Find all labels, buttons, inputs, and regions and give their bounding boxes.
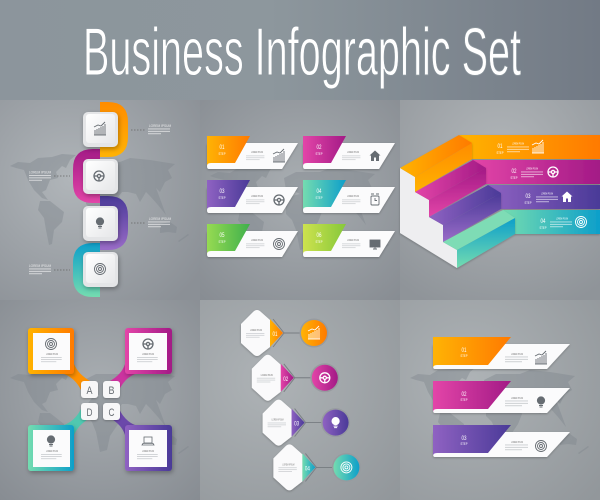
step 05: LOREM IPSUM xyxy=(251,238,263,242)
step 04: 04 xyxy=(316,188,322,195)
connector B xyxy=(110,364,135,390)
ribbon 03: 03 xyxy=(526,193,531,200)
ribbon 04: 04 xyxy=(540,218,546,225)
tile C: C xyxy=(108,407,115,419)
panel: vertical ribbon steps xyxy=(0,100,200,300)
tile A: A xyxy=(86,385,93,397)
ribbon: purple xyxy=(100,196,128,250)
tile D xyxy=(81,403,98,420)
step 01: LOREM IPSUM xyxy=(511,352,523,356)
panel: 3D staircase xyxy=(400,100,600,300)
step 03 xyxy=(207,180,298,213)
step 05: STEP xyxy=(218,240,226,244)
step 01: STEP xyxy=(460,354,468,358)
step 01: LOREM IPSUM xyxy=(251,150,263,154)
step 02: 02 xyxy=(462,391,467,398)
callout: step 2: LOREM IPSUM xyxy=(29,170,51,174)
step 03 xyxy=(433,425,570,457)
staircase xyxy=(400,135,515,268)
step 05 xyxy=(207,224,298,257)
tile C xyxy=(103,403,120,420)
step 04: STEP xyxy=(316,196,323,200)
card: D bulb xyxy=(28,425,74,471)
step 04: LOREM IPSUM xyxy=(282,462,295,466)
card: A target: LOREM IPSUM xyxy=(46,352,58,356)
ribbon 01: STEP xyxy=(496,151,504,155)
step 02: 02 xyxy=(283,376,289,383)
ribbon: orange xyxy=(100,102,128,157)
step 06: LOREM IPSUM xyxy=(347,238,359,242)
ribbon 04 xyxy=(503,210,600,234)
ribbon 03 xyxy=(488,185,600,209)
step 02 xyxy=(433,381,570,413)
card: B gear xyxy=(125,328,172,374)
ribbon 01: LOREM IPSUM xyxy=(512,142,524,146)
step 06: STEP xyxy=(316,240,323,244)
step 03: LOREM IPSUM xyxy=(511,440,523,444)
callout: step 1 xyxy=(131,124,171,134)
title banner xyxy=(0,0,600,100)
step 01: 01 xyxy=(220,144,225,151)
step 02: LOREM IPSUM xyxy=(511,396,523,400)
callout: step 3: LOREM IPSUM xyxy=(149,217,171,221)
callout: step 1: LOREM IPSUM xyxy=(149,124,171,128)
connector C xyxy=(110,409,135,435)
step 04: LOREM IPSUM xyxy=(347,194,359,198)
step 04: 04 xyxy=(305,465,310,472)
panel: six step tabs xyxy=(200,100,400,300)
ribbon 02: STEP xyxy=(510,176,518,180)
step 01: 01 xyxy=(272,331,278,338)
step 03: STEP xyxy=(218,196,226,200)
card: A target xyxy=(28,328,74,374)
step 03: STEP xyxy=(460,442,468,446)
ribbon 02: 02 xyxy=(512,168,517,175)
ribbon 02: LOREM IPSUM xyxy=(526,166,538,170)
step 03: 03 xyxy=(220,188,225,195)
step 02 xyxy=(303,136,395,169)
step 02: STEP xyxy=(460,398,468,402)
ribbon 03: STEP xyxy=(524,201,532,205)
step 02: 02 xyxy=(316,144,322,151)
card: target xyxy=(83,252,118,287)
card: D bulb: LOREM IPSUM xyxy=(46,449,58,453)
tile D: D xyxy=(86,407,93,419)
step 02: STEP xyxy=(316,152,323,156)
step 01 xyxy=(241,310,328,356)
step 01: 01 xyxy=(462,347,467,354)
ribbon 01 xyxy=(460,135,600,159)
step 01: STEP xyxy=(218,152,226,156)
step 06: 06 xyxy=(316,232,322,239)
card: gear xyxy=(83,159,118,194)
step 01: LOREM IPSUM xyxy=(250,328,262,332)
callout: step 4 xyxy=(29,264,70,274)
step 03 xyxy=(263,400,350,446)
step 01 xyxy=(433,337,570,369)
connector A xyxy=(64,364,90,390)
ribbon 04: STEP xyxy=(540,226,547,230)
step 04 xyxy=(303,180,395,213)
ribbon 01: 01 xyxy=(498,143,503,150)
callout: step 3 xyxy=(131,217,171,227)
callout: step 4: LOREM IPSUM xyxy=(29,264,51,268)
tile B: B xyxy=(108,385,114,397)
tile A xyxy=(81,381,98,398)
step 03: 03 xyxy=(462,435,467,442)
panel: hexagon timeline xyxy=(200,300,400,500)
callout: step 2 xyxy=(29,170,70,181)
step 06 xyxy=(303,224,395,257)
connector D xyxy=(64,409,90,435)
card: bar chart xyxy=(83,112,118,147)
ribbon 04: LOREM IPSUM xyxy=(556,216,568,220)
step 03: LOREM IPSUM xyxy=(251,194,263,198)
card: C laptop xyxy=(125,425,172,471)
step 02: LOREM IPSUM xyxy=(261,373,273,377)
step 05: 05 xyxy=(220,232,225,239)
card: C laptop: LOREM IPSUM xyxy=(142,449,154,453)
step 03: LOREM IPSUM xyxy=(272,418,284,422)
step 02: LOREM IPSUM xyxy=(347,150,359,154)
step 03: 03 xyxy=(294,421,299,428)
ribbon 02 xyxy=(472,160,600,184)
step 04 xyxy=(273,444,361,490)
card: B gear: LOREM IPSUM xyxy=(142,352,154,356)
card: bulb xyxy=(83,206,118,241)
panel: three step tabs xyxy=(400,300,600,500)
tile B xyxy=(103,381,120,398)
ribbon 03: LOREM IPSUM xyxy=(541,192,553,196)
ribbon: teal xyxy=(73,243,100,297)
step 01 xyxy=(207,136,298,169)
ribbon: magenta xyxy=(73,149,100,203)
step 02 xyxy=(252,355,339,401)
panel: ABCD quadrant xyxy=(0,300,200,500)
